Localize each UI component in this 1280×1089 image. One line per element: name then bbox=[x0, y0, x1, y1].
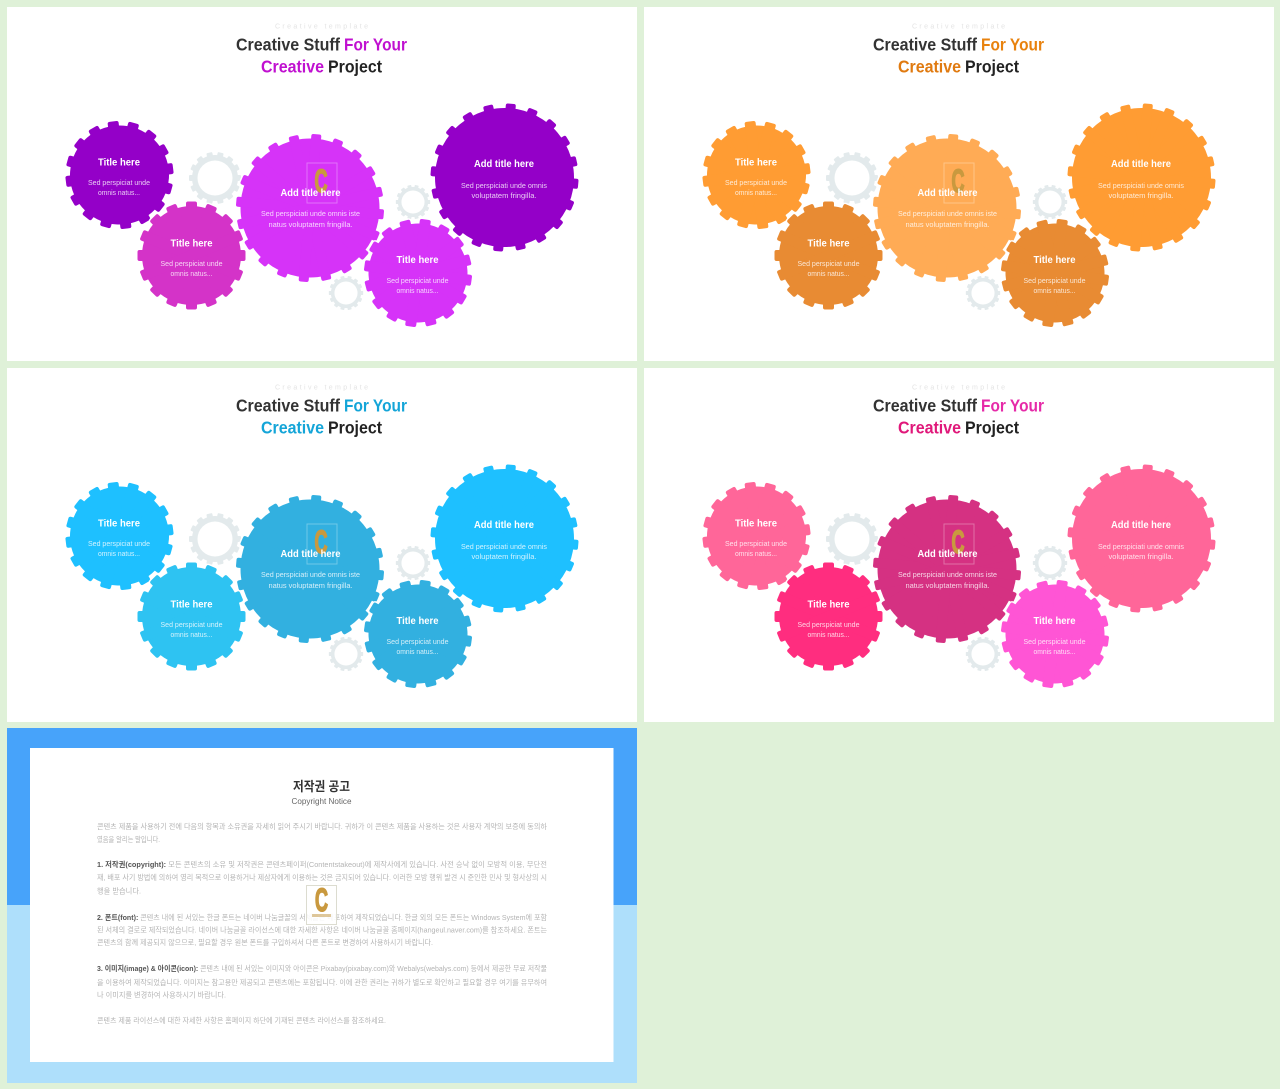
heading: Creative bbox=[261, 56, 324, 76]
paragraph: copyright: 행을 받습니다. bbox=[97, 886, 141, 896]
gear: centre large: natus voluptatem fringilla. bbox=[905, 581, 989, 590]
heading: Creative bbox=[261, 418, 324, 438]
gear: centre large bbox=[866, 128, 1027, 288]
icon: watermark logo: C bbox=[314, 163, 328, 199]
notice title: 저작권 공고 bbox=[293, 779, 350, 794]
gear: far right: Sed perspiciati unde omnis bbox=[461, 181, 547, 190]
gear: centre large: Sed perspiciati unde omnis iste bbox=[898, 570, 996, 579]
paragraph: copyright: 1. 저작권(copyright): 모든 콘텐츠의 소유 및 저작권은 콘텐츠페이퍼(Contentstakeout)에 제작사에게 있습니다. 사전 승낙 없이 모방적 이용, 무단전 bbox=[97, 859, 547, 869]
heading: Creative bbox=[898, 418, 961, 438]
gear: far right bbox=[1061, 458, 1221, 619]
panel: pink gears bbox=[644, 368, 1274, 722]
gear: far right bbox=[1061, 97, 1221, 258]
gear: lower right bbox=[357, 212, 479, 334]
gear: lower right: omnis natus... bbox=[1033, 647, 1075, 656]
paragraph: image and icon: 3. 이미지(image) & 아이콘(icon): 콘텐츠 내에 된 서있는 이미지와 아이콘은 Pixabay(pixabay.com)와 Webalys(webalys.com) 등에서 제공한 무료 저작물 bbox=[97, 963, 547, 973]
gear: lower right bbox=[994, 212, 1115, 334]
gear: lower right: Sed perspiciat unde bbox=[386, 637, 448, 646]
gear: lower left bbox=[138, 202, 246, 310]
heading: Project bbox=[328, 56, 382, 76]
gear: far left: Title here bbox=[734, 158, 777, 168]
intro paragraph: 콘텐츠 제품을 사용하기 전에 다음의 항목과 소유권을 자세히 읽어 주시기 바랍니다. 귀하가 이 콘텐츠 제품을 사용하는 것은 사용자 계약의 보증에 동의하 bbox=[97, 821, 547, 831]
small label: Creative template bbox=[912, 24, 1005, 30]
gear: centre large: Sed perspiciati unde omnis iste bbox=[261, 570, 360, 579]
panel: blue gears bbox=[7, 368, 637, 722]
panel: orange gears bbox=[644, 7, 1274, 361]
gear: lower left: Title here bbox=[170, 600, 213, 610]
gear: lower right: Sed perspiciat unde bbox=[386, 276, 448, 285]
gear: far left bbox=[696, 476, 816, 596]
heading bbox=[236, 396, 407, 438]
icon: watermark logo: C bbox=[951, 524, 964, 560]
icon: small grey cog lower bbox=[329, 276, 363, 310]
small label: Creative template bbox=[275, 24, 368, 30]
gear: lower left: omnis natus... bbox=[807, 269, 849, 278]
gear: centre large: natus voluptatem fringilla. bbox=[268, 220, 352, 229]
closing note: 콘텐츠 제품 라이선스에 대한 자세한 사항은 홈페이지 하단에 기재된 콘텐츠 라이선스를 참조하세요. bbox=[97, 1015, 386, 1025]
gear: lower right: Sed perspiciat unde bbox=[1023, 637, 1085, 646]
icon: small grey cog upper bbox=[396, 546, 430, 580]
gear: far left: Sed perspiciat unde bbox=[88, 539, 150, 548]
icon: watermark logo: C bbox=[315, 882, 328, 918]
heading bbox=[872, 396, 1044, 438]
heading: For Your bbox=[344, 396, 407, 416]
gear: lower right: omnis natus... bbox=[1033, 286, 1075, 295]
background top band bbox=[7, 728, 637, 905]
gear: lower right: Title here bbox=[396, 255, 439, 266]
paragraph: font: 된 서체의 결로로 제작되었습니다. 네이버 나눔글꼴 라이선스에 대한 자세한 사항은 네이버 나눔글꼴 홈페이지(hangeul.naver.com)를 참조하세요. 폰트는 bbox=[97, 924, 547, 934]
paragraph: image and icon: 나 이미지를 변경하여 사용하시기 바랍니다. bbox=[97, 990, 226, 1000]
small label: Creative template bbox=[912, 384, 1005, 392]
paragraph: font: 2. 폰트(font): 콘텐츠 내에 된 서있는 한글 폰트는 네이버 나눔글꼴의 서체들은 배포하여 제작되었습니다. 한글 외의 모든 폰트는 Windows System에 포함 bbox=[97, 912, 547, 922]
gear: far right: Add title here bbox=[1110, 520, 1171, 531]
gear: far right: Sed perspiciati unde omnis bbox=[1098, 181, 1184, 190]
heading: For Your bbox=[980, 34, 1044, 54]
gear: lower left: omnis natus... bbox=[170, 269, 212, 278]
icon: watermark logo bbox=[944, 524, 974, 564]
icon: watermark logo bbox=[944, 163, 974, 203]
gear: far left: omnis natus... bbox=[734, 549, 776, 558]
gear: lower right: Title here bbox=[1033, 255, 1075, 266]
icon: small grey cog upper bbox=[396, 185, 430, 219]
icon: large grey cog bbox=[826, 152, 878, 204]
heading: Creative Stuff bbox=[236, 396, 340, 416]
icon: watermark logo bbox=[307, 524, 337, 564]
heading: Project bbox=[328, 418, 382, 438]
gear: lower left: omnis natus... bbox=[807, 630, 849, 639]
icon: large grey cog bbox=[189, 513, 241, 565]
icon: watermark logo: C bbox=[314, 524, 328, 560]
paragraph: copyright: 재, 배포 사기 방법에 의하여 영리 목적으로 이용하거나 제삼자에게 이용하는 것은 금지되어 있습니다. 이러한 모방 행위 발견 시 준인한 민사 및 형사상의 시 bbox=[97, 872, 547, 882]
gear: lower left bbox=[774, 562, 882, 670]
panel: copyright notice bbox=[7, 728, 637, 1083]
icon: large grey cog bbox=[189, 152, 241, 204]
heading: Creative Stuff bbox=[236, 34, 340, 54]
gear: far right: Sed perspiciati unde omnis bbox=[461, 542, 547, 551]
heading: For Your bbox=[980, 396, 1044, 416]
gear: far right: Add title here bbox=[1110, 159, 1171, 170]
gear: far right bbox=[424, 458, 585, 619]
gear: far right: Sed perspiciati unde omnis bbox=[1098, 542, 1184, 551]
gear: lower right: omnis natus... bbox=[396, 286, 438, 295]
icon: watermark logo bbox=[307, 163, 337, 203]
icon: watermark logo: C bbox=[951, 163, 964, 199]
gear: lower right bbox=[994, 573, 1115, 695]
gear: far right bbox=[424, 97, 585, 258]
panel: purple gears bbox=[7, 7, 637, 361]
icon: small grey cog lower bbox=[329, 637, 363, 671]
gear: centre large: Add title here bbox=[917, 549, 977, 560]
gear: far left: Sed perspiciat unde bbox=[724, 178, 786, 187]
paragraph: image and icon: 을 이용하여 제작되었습니다. 이미지는 참고용만 제공되고 콘텐츠에는 포함됩니다. 이에 관한 권리는 귀하가 별도로 확인하고 필요할 경우 여기를 유무하여 bbox=[97, 977, 547, 987]
gear: centre large: natus voluptatem fringilla. bbox=[905, 220, 989, 229]
heading: Creative Stuff bbox=[872, 396, 977, 416]
gear: centre large: Sed perspiciati unde omnis iste bbox=[261, 209, 360, 218]
heading bbox=[236, 34, 407, 76]
gear: far right: Add title here bbox=[474, 520, 534, 531]
small label: Creative template bbox=[275, 384, 368, 392]
heading: Project bbox=[964, 56, 1019, 76]
white notice card bbox=[30, 748, 614, 1062]
gear: lower left bbox=[774, 202, 882, 310]
notice subtitle: Copyright Notice bbox=[292, 796, 352, 806]
gear: lower left: omnis natus... bbox=[170, 630, 212, 639]
icon: small grey cog upper bbox=[1032, 185, 1067, 219]
gear: lower left: Sed perspiciat unde bbox=[160, 259, 222, 268]
gear: lower right: Title here bbox=[1033, 616, 1075, 627]
gear: far left: Sed perspiciat unde bbox=[724, 539, 786, 548]
gear: far right: Add title here bbox=[474, 159, 534, 170]
gear: centre large: Add title here bbox=[917, 188, 977, 199]
gear: lower left bbox=[138, 562, 246, 670]
paragraph: font: 콘텐츠의 함께 제공되지 않으므로, 필요할 경우 원본 폰트를 구입하셔서 다른 폰트로 변경하여 사용하시기 바랍니다. bbox=[97, 937, 433, 947]
icon: small grey cog upper bbox=[1032, 546, 1067, 580]
gear: lower left: Title here bbox=[807, 600, 849, 610]
icon: watermark logo bbox=[306, 882, 336, 924]
icon: small grey cog lower bbox=[965, 637, 1000, 671]
gear: far left: omnis natus... bbox=[98, 549, 140, 558]
heading: Project bbox=[964, 418, 1019, 438]
heading: For Your bbox=[344, 34, 407, 54]
gear: lower left: Title here bbox=[170, 238, 213, 250]
gear: far left: Sed perspiciat unde bbox=[88, 178, 150, 187]
gear: far left bbox=[59, 115, 180, 235]
icon: small grey cog lower bbox=[965, 276, 1000, 310]
paragraph: copyright bbox=[97, 859, 547, 896]
heading: Creative bbox=[898, 56, 961, 76]
gear: far left: omnis natus... bbox=[98, 188, 140, 197]
paragraph: image and icon bbox=[97, 963, 547, 1000]
gear: centre large: Sed perspiciati unde omnis iste bbox=[898, 209, 996, 218]
gear: far left: omnis natus... bbox=[734, 188, 776, 197]
gear: lower left: Sed perspiciat unde bbox=[797, 620, 859, 629]
gear: far left: Title here bbox=[98, 158, 140, 168]
gear: lower right bbox=[357, 573, 479, 695]
intro paragraph bbox=[97, 821, 547, 844]
intro paragraph: 였음을 알리는 말입니다. bbox=[97, 834, 160, 844]
gear: far left: Title here bbox=[734, 518, 777, 530]
background bottom band bbox=[7, 905, 637, 1083]
heading: Creative Stuff bbox=[872, 34, 977, 54]
gear: centre large bbox=[230, 489, 390, 649]
gear: lower right: Sed perspiciat unde bbox=[1023, 276, 1085, 285]
gear: far left: Title here bbox=[98, 518, 140, 530]
icon: large grey cog bbox=[826, 513, 878, 565]
heading bbox=[872, 34, 1044, 76]
gear: far left bbox=[696, 115, 816, 235]
gear: lower right: omnis natus... bbox=[396, 647, 438, 656]
gear: lower left: Sed perspiciat unde bbox=[797, 259, 859, 268]
gear: centre large bbox=[230, 128, 390, 288]
gear: centre large: natus voluptatem fringilla. bbox=[268, 581, 352, 590]
gear: centre large: Add title here bbox=[280, 188, 341, 199]
gear: far right: voluptatem fringilla. bbox=[1108, 552, 1173, 561]
gear: centre large: Add title here bbox=[280, 549, 341, 560]
gear: far right: voluptatem fringilla. bbox=[472, 191, 536, 200]
gear: centre large bbox=[866, 489, 1027, 649]
gear: lower left: Title here bbox=[807, 238, 849, 250]
gear: far right: voluptatem fringilla. bbox=[1108, 191, 1173, 200]
gear: far left bbox=[59, 476, 180, 596]
gear: lower left: Sed perspiciat unde bbox=[160, 620, 222, 629]
paragraph: font bbox=[97, 912, 547, 947]
gear: lower right: Title here bbox=[396, 616, 439, 627]
gear: far right: voluptatem fringilla. bbox=[472, 552, 536, 561]
